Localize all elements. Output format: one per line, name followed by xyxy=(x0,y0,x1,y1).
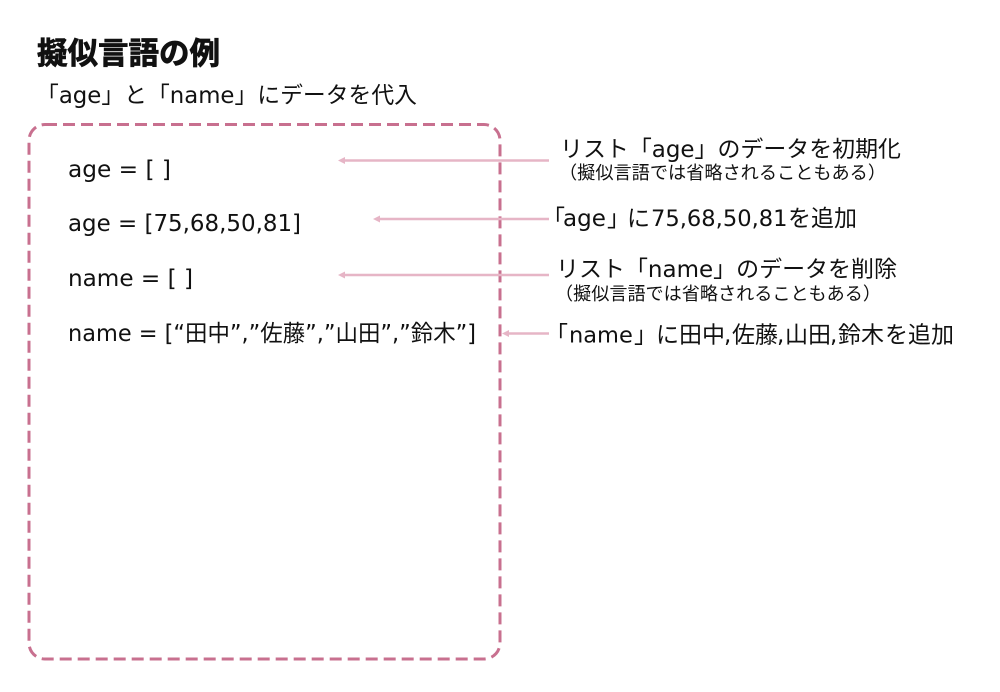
annotation: age append: age xyxy=(563,206,606,232)
code line: name values: name = [“田中”,”佐藤”,”山田”,”鈴木”] xyxy=(68,321,476,347)
arrow: age append xyxy=(380,218,549,220)
annotation: name append: , xyxy=(777,322,784,348)
annotation: name clear xyxy=(555,257,897,305)
annotation: age append: 」 xyxy=(607,206,630,232)
annotation: name append: , xyxy=(724,322,731,348)
code line: age values: age = [75,68,50,81] xyxy=(68,211,301,237)
annotation: age append: を追加 xyxy=(788,206,857,232)
arrow: name append xyxy=(509,332,549,335)
annotation: age initialise xyxy=(559,137,901,184)
subtitle: 「age」と「name」にデータを代入 xyxy=(36,83,417,109)
annotation: age append: 75,68,50,81 xyxy=(651,206,788,232)
arrow: age initialise xyxy=(345,159,549,162)
annotation: name append: 佐藤 xyxy=(732,322,778,348)
code line: age empty: age = [ ] xyxy=(68,157,171,183)
annotation: name append: 鈴木 xyxy=(838,322,884,348)
title: 擬似言語の例 xyxy=(37,37,220,72)
code lines xyxy=(68,157,476,347)
annotation: name clear: リスト「name」のデータを削除 xyxy=(556,257,897,283)
code line: name empty: name = [ ] xyxy=(68,266,193,292)
arrow: name clear xyxy=(345,274,549,276)
annotation: name append: 山田 xyxy=(785,322,831,348)
annotation: age append: 「 xyxy=(542,206,565,232)
annotation: age initialise: （擬似言語では省略されることもある） xyxy=(559,163,886,184)
panel: pseudocode dashed box xyxy=(29,124,500,659)
annotation: name append: 」 xyxy=(634,322,657,348)
annotation: name append: に田中 xyxy=(656,322,725,348)
annotation: name append: , xyxy=(830,322,837,348)
annotation: name append: 「 xyxy=(545,322,568,348)
annotation: name append: を追加 xyxy=(885,322,954,348)
annotation: name clear: （擬似言語では省略されることもある） xyxy=(555,284,881,305)
annotation: name append: name xyxy=(569,322,633,348)
annotation: age append: に xyxy=(627,206,650,232)
annotation: age initialise: リスト「age」のデータを初期化 xyxy=(560,137,901,163)
